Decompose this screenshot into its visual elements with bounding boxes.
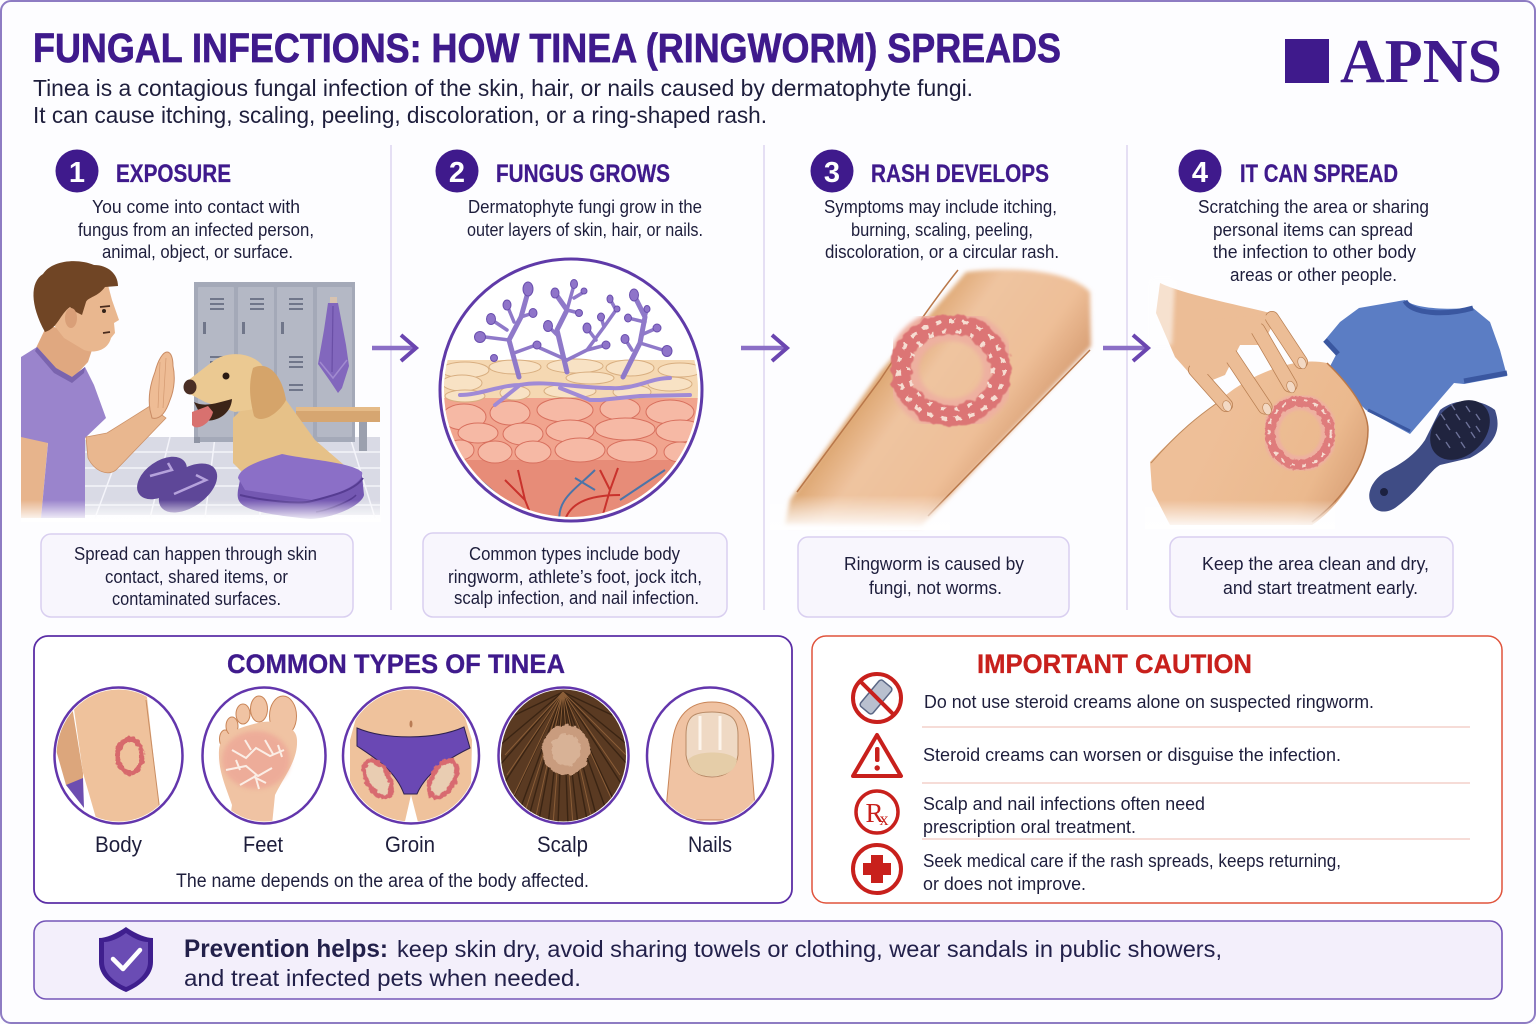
prevention text xyxy=(184,935,1222,991)
step 1 heading xyxy=(56,150,231,192)
logo: APNS: APNS xyxy=(1340,28,1502,96)
step 4 description xyxy=(1198,197,1429,285)
face xyxy=(50,268,119,352)
caution text 4 xyxy=(923,850,1341,894)
type: nails xyxy=(647,688,773,857)
title: FUNGAL INFECTIONS: HOW TINEA (RINGWORM) SPREADS xyxy=(33,25,1061,71)
callout: spread xyxy=(41,534,353,617)
step 4 heading: 4 xyxy=(1192,157,1208,189)
step 3 description: discoloration, or a circular rash. xyxy=(825,242,1059,262)
man xyxy=(21,261,174,518)
type: groin xyxy=(343,685,479,857)
step 2 description: Dermatophyte fungi grow in the xyxy=(468,197,702,217)
prevention text: Prevention helps: xyxy=(184,935,388,963)
heading: caution: IMPORTANT CAUTION xyxy=(977,649,1252,679)
caution text 4: Seek medical care if the rash spreads, keeps returning, xyxy=(923,850,1341,871)
step 1 description: You come into contact with xyxy=(92,197,300,217)
intro text: Tinea is a contagious fungal infection of the skin, hair, or nails caused by dermatophyte fungi. xyxy=(33,75,973,101)
panel: step 4 it can spread xyxy=(1145,150,1507,617)
panel: common types of tinea xyxy=(34,636,792,903)
hair xyxy=(33,261,118,332)
shirt xyxy=(21,347,106,518)
callout: keep clean: and start treatment early. xyxy=(1223,577,1418,598)
step 1 description xyxy=(78,197,314,262)
heading: common types: COMMON TYPES OF TINEA xyxy=(227,649,565,679)
callout: keep clean xyxy=(1170,537,1453,617)
types caption: The name depends on the area of the body affected. xyxy=(176,871,589,892)
eye and mouth xyxy=(100,306,110,333)
panel: important caution xyxy=(812,636,1502,903)
forearm xyxy=(86,406,166,473)
type: body: Body xyxy=(95,832,142,857)
step 1 heading: EXPOSURE xyxy=(116,160,231,188)
step 4 heading: IT CAN SPREAD xyxy=(1240,160,1398,188)
step 3 description: burning, scaling, peeling, xyxy=(851,220,1033,240)
callout: caused by fungi: fungi, not worms. xyxy=(869,577,1002,598)
callout: common types: Common types include body xyxy=(469,543,681,564)
step 3 heading: 3 xyxy=(824,157,840,189)
panel: step 3 rash develops xyxy=(770,150,1091,617)
callout: spread: contact, shared items, or xyxy=(105,566,288,587)
dog xyxy=(184,354,344,480)
bench xyxy=(296,407,380,451)
callout: common types: scalp infection, and nail infection. xyxy=(454,587,699,608)
blue t-shirt xyxy=(1325,300,1507,434)
ring rash xyxy=(898,321,1004,419)
step 1 description: fungus from an infected person, xyxy=(78,220,314,240)
icon: prescription: R xyxy=(865,798,884,828)
arrow 1 xyxy=(372,335,416,361)
type: feet xyxy=(202,688,326,857)
step 3 heading xyxy=(810,150,1049,192)
illustration: scratching hand, shirt and brush xyxy=(1145,280,1507,529)
callout: caused by fungi xyxy=(798,537,1069,617)
step 4 description: areas or other people. xyxy=(1230,265,1397,285)
illustration: skin cross-section with fungal hyphae xyxy=(440,259,704,525)
type: body xyxy=(54,688,182,857)
neck xyxy=(36,325,92,378)
icon: warning triangle xyxy=(853,735,901,776)
flip flops xyxy=(129,448,226,522)
icon: no steroid cream xyxy=(853,674,901,722)
step 3 description xyxy=(824,197,1059,262)
step 4 heading xyxy=(1178,150,1398,192)
panel: step 2 fungus grows xyxy=(423,150,727,617)
hand xyxy=(1150,280,1308,416)
step 1 description: animal, object, or surface. xyxy=(102,242,293,262)
step 2 heading: FUNGUS GROWS xyxy=(496,160,670,188)
step 4 description: Scratching the area or sharing xyxy=(1198,197,1429,217)
callout: common types: ringworm, athlete’s foot, jock itch, xyxy=(448,566,702,587)
callout: keep clean: Keep the area clean and dry, xyxy=(1202,553,1429,574)
ring rash xyxy=(1269,400,1331,466)
leg xyxy=(1150,361,1368,525)
hand xyxy=(149,352,174,418)
step 2 heading: 2 xyxy=(449,157,465,189)
step 3 heading: RASH DEVELOPS xyxy=(871,160,1049,188)
bare rear arm xyxy=(21,436,48,518)
step 2 description xyxy=(467,197,703,240)
lockers xyxy=(194,282,355,443)
type: nails: Nails xyxy=(688,832,732,857)
panel: prevention banner xyxy=(34,921,1502,999)
type: groin: Groin xyxy=(385,832,435,857)
callout: common types xyxy=(423,533,727,617)
callout: spread: Spread can happen through skin xyxy=(74,543,317,564)
caution text 3 xyxy=(923,793,1205,837)
hanging towel xyxy=(318,297,349,393)
step 2 heading xyxy=(436,150,670,192)
step 2 description: outer layers of skin, hair, or nails. xyxy=(467,220,703,240)
prevention text: keep skin dry, avoid sharing towels or clothing, wear sandals in public showers, xyxy=(397,936,1222,962)
caution text 1: Do not use steroid creams alone on suspected ringworm. xyxy=(924,691,1374,712)
caution text 3: Scalp and nail infections often need xyxy=(923,793,1205,814)
type: scalp xyxy=(498,687,630,857)
callout: spread: contaminated surfaces. xyxy=(112,588,281,609)
caution text 3: prescription oral treatment. xyxy=(923,816,1136,837)
caution text 4: or does not improve. xyxy=(923,873,1086,894)
illustration: arm with ring-shaped rash xyxy=(770,269,1091,530)
intro text: It can cause itching, scaling, peeling, discoloration, or a ring-shaped rash. xyxy=(33,102,767,128)
step 3 description: Symptoms may include itching, xyxy=(824,197,1057,217)
hairbrush xyxy=(1369,388,1502,512)
callout: caused by fungi: Ringworm is caused by xyxy=(844,553,1025,574)
folded towel xyxy=(238,454,364,519)
step 4 description: the infection to other body xyxy=(1213,242,1416,262)
intro text xyxy=(33,75,973,128)
illustration: man, dog and locker room xyxy=(21,261,381,522)
caution text 2: Steroid creams can worsen or disguise the infection. xyxy=(923,744,1341,765)
panel: step 1 exposure xyxy=(21,150,381,617)
arrow 2 xyxy=(741,335,787,361)
step 4 description: personal items can spread xyxy=(1213,220,1413,240)
type: scalp: Scalp xyxy=(537,832,588,857)
step 1 heading: 1 xyxy=(69,157,85,189)
hyphae xyxy=(460,285,690,405)
type: feet: Feet xyxy=(243,832,283,857)
icon: medical cross xyxy=(853,845,901,893)
icon: shield with check xyxy=(99,927,153,992)
icon: prescription xyxy=(856,791,898,833)
prevention text: and treat infected pets when needed. xyxy=(184,965,581,991)
icon: prescription: x xyxy=(880,809,889,829)
arrow 3 xyxy=(1103,335,1148,361)
